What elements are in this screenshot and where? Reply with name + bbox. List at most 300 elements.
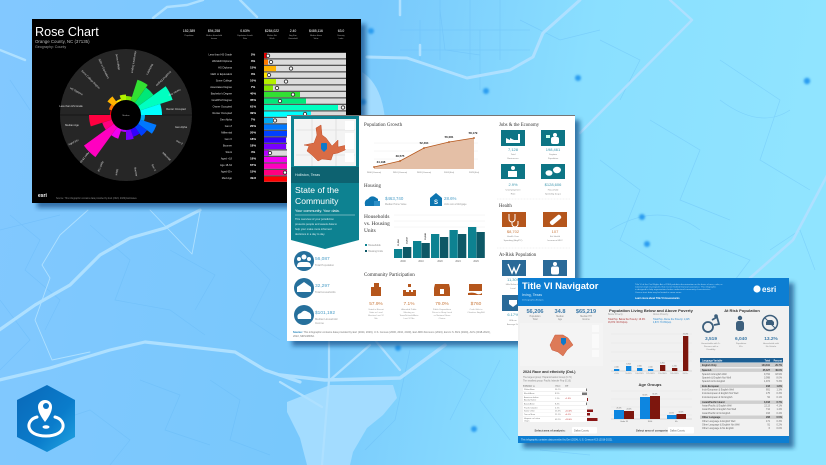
language table: 0.1% [777, 396, 783, 399]
legend: poverty: 4,872: 70.0%/pop. [653, 322, 672, 324]
community participation stats: $760 [471, 301, 482, 307]
bar chart: percentages with benchmark markers: Gen X [225, 137, 232, 141]
language table: 0.3% [777, 420, 783, 423]
stat: total households: Total Households [315, 290, 336, 294]
bar chart: households vs housing units: 2020 [437, 260, 443, 263]
bar chart: percentages with benchmark markers: Aged <18 [221, 156, 233, 160]
key stats row: 152,389 [183, 29, 195, 33]
sidebar: teal title column [291, 116, 359, 249]
language table: 4.1% [777, 404, 783, 408]
title text: Community [295, 196, 339, 206]
key stats row: 2.40 [290, 29, 296, 33]
language table: Other Language & No English [702, 427, 734, 430]
key stats row: $485,116 [309, 29, 323, 33]
key stats row: Population Growth [237, 34, 253, 37]
area chart: population growth: 2000 (Census) [367, 172, 381, 174]
bar chart: percentages with benchmark markers: 20% [250, 130, 256, 134]
at risk icons and stats: Disability [707, 348, 716, 351]
legend: poverty: 16,872: 30.0%/pop. [608, 322, 628, 324]
bar chart: percentages with benchmark markers: 67% [250, 163, 256, 167]
rose chart wheel: Gen Alpha [175, 125, 188, 129]
community participation stats: Meeting on [404, 311, 415, 314]
at risk icons and stats: No Vehicle [766, 346, 777, 348]
community participation stats: Chains [439, 318, 446, 320]
at-risk stat tiles: 6.17% [507, 312, 519, 317]
key stats row [183, 29, 345, 40]
bar chart: percentages with benchmark markers: 10% [250, 78, 256, 82]
race and ethnicity table: +18.0% [565, 419, 572, 421]
panel: Title VI Navigator [518, 278, 794, 448]
bar chart: percentages with benchmark markers: 15% [250, 66, 256, 70]
race and ethnicity table: 25.3% [555, 410, 561, 412]
heading: Population Living Below and Above Poverty: Population Living Below and Above Poverty [609, 308, 694, 313]
bar chart: households vs housing units: 2024 [455, 260, 461, 263]
rose chart wheel: Grad/Prof Degree [155, 70, 172, 88]
language table: 1.3% [777, 388, 783, 392]
community participation stats: vs National Store [434, 314, 451, 317]
at risk icons and stats: Population [736, 342, 747, 345]
race and ethnicity table: 1.1% [555, 398, 560, 400]
community participation stats: Voted in Recent [368, 308, 384, 311]
race and ethnicity table: 2024 Race and ethnicity (DoL) [523, 370, 576, 374]
race and ethnicity table: 36.2% [555, 389, 561, 391]
header band: is designed to help organizations better understand community characteristics. [635, 288, 711, 291]
language table: Asian/Pacific & English Well [702, 404, 732, 408]
source note: 2022, MDS/MDS2. [293, 334, 315, 338]
key stats: population, age, income: 56,206 [526, 309, 544, 315]
bar chart: poverty: 4,800 [660, 362, 665, 364]
community participation stats: Town/School Affairs [399, 314, 419, 317]
language table: 6 [769, 427, 771, 430]
language table: 1,974 [764, 380, 771, 383]
area chart: population growth: 56,081 [445, 135, 454, 139]
key stats row: Income [211, 38, 217, 40]
heading: Health: Health [499, 204, 512, 209]
rose chart wheel: Boomer [133, 167, 139, 177]
bar chart: percentages with benchmark markers: Med Age [222, 176, 233, 180]
bar chart: percentages with benchmark markers: 61% [250, 104, 256, 108]
bar chart: percentages with benchmark markers: 15% [250, 170, 256, 174]
heading: Housing: Housing [364, 184, 381, 189]
heading: Population Growth: Population Growth [364, 123, 403, 128]
language table: 49.0% [775, 369, 783, 372]
bar chart: households vs housing units: 2000 [400, 260, 406, 263]
header band: Learn more about Title VI Assessments [635, 297, 680, 300]
race and ethnicity table: +6.1% [565, 414, 571, 416]
health stat tiles: $8,702 [507, 229, 520, 234]
jobs and economy stat tiles: 198,461 [546, 147, 561, 152]
rose chart wheel: Less than HS Grade [59, 104, 83, 108]
panel: Rose Chart [32, 19, 366, 208]
heading: Rose Chart: Geography: County [35, 45, 66, 49]
bar chart: poverty: 2,110 [648, 366, 653, 368]
race and ethnicity table: 8.9% [555, 393, 560, 395]
bar chart: percentages with benchmark markers: Millennial [221, 130, 232, 134]
bar chart: poverty: 2,660 [637, 366, 642, 368]
key stats row: Median Home [310, 35, 322, 37]
stat: median home value: Median Home Value [385, 203, 407, 206]
at risk icons and stats: Households with 1+ [701, 342, 721, 345]
language table: 175 [766, 392, 771, 395]
language table: 691 [766, 388, 771, 392]
bar chart: percentages with benchmark markers: 7% [251, 85, 255, 89]
at-risk stat tiles [502, 260, 567, 326]
locator map [294, 119, 356, 166]
rose chart wheel: Silent [115, 169, 119, 176]
bar chart: age groups [611, 391, 692, 423]
language table: Spanish & English Well [702, 373, 727, 376]
stat: households with mortgage: S [434, 200, 438, 206]
stat: households with mortgage [430, 193, 467, 206]
race and ethnicity table: The smallest group: Pacific Islander Pop (0.16) [523, 380, 571, 382]
stat: median home value [365, 196, 407, 206]
at risk icons and stats [701, 314, 780, 351]
header band: Irving, Texas [522, 293, 542, 297]
rose chart wheel: Renter Occupied [166, 107, 186, 111]
stat: total population: 56,087 [315, 256, 330, 262]
stat: median household income: Income [315, 321, 324, 325]
stat: total population: Total Population [315, 263, 335, 267]
community participation stats: 57.9% [369, 301, 384, 307]
title text: This overview of your jurisdiction [295, 217, 334, 221]
bar chart: percentages with benchmark markers: 3% [251, 59, 255, 63]
rose chart wheel: Some College Degree [80, 69, 102, 90]
language table: 91 [767, 424, 771, 426]
bar chart: poverty: 3,963 [626, 364, 631, 366]
stat: total population [294, 251, 335, 271]
health stat tiles: 107 [552, 229, 559, 234]
race and ethnicity table: 43.2% [555, 419, 561, 421]
language table: 193 [766, 412, 771, 415]
at-risk stat tiles: Level [510, 288, 516, 290]
language table: Spanish [702, 369, 712, 372]
community participation stats: Election Last 12 [368, 314, 385, 317]
rose chart wheel: Gen Z [175, 139, 184, 146]
community participation stats: Attended Public [401, 308, 418, 311]
rose chart wheel: Bachelor's [145, 63, 154, 76]
heading: At-Risk Population: At-Risk Population [499, 253, 537, 258]
at-risk stat tiles: 11,309 [507, 277, 520, 282]
bar chart: percentages with benchmark markers: 20% [250, 124, 256, 128]
language table: 18.9% [775, 373, 783, 376]
language table: 0.3% [777, 392, 783, 395]
at-risk stat tiles: HHs Below the [506, 283, 521, 286]
race and ethnicity table: Diff [565, 386, 569, 388]
selector: area of comparison: Select area of comparison for: [636, 428, 676, 432]
bar chart: poverty: 200%+ [683, 373, 688, 375]
area chart: population growth [367, 131, 479, 174]
esri logo and source line: esri [38, 193, 48, 199]
language table: Asian/Pacific Island [702, 401, 725, 404]
language table: 144,811 [761, 364, 771, 367]
language table: 0.4% [777, 412, 783, 415]
health stat tiles: Health Care [507, 235, 520, 238]
esri logo and source line [38, 193, 138, 200]
footer band [518, 436, 789, 443]
stat: households with mortgage: Units w/o a Mortgage [444, 203, 467, 206]
bar chart: households vs housing units [365, 215, 485, 263]
language table: Other Language [702, 416, 721, 419]
key stats: population, age, income: Income [582, 319, 590, 321]
panel: State of the Community [287, 115, 580, 346]
language table: 0.5% [777, 416, 783, 419]
community participation stats: Prices to Shop Local [432, 311, 453, 314]
heading: Households vs Housing Units: vs. Housing [364, 221, 390, 227]
bar chart: percentages with benchmark markers: Bachelor's Degree [211, 92, 233, 96]
rose chart wheel [56, 49, 196, 181]
language table: 52 [767, 396, 771, 399]
rose chart wheel: Millennial [161, 151, 172, 162]
language table: 0.0% [777, 427, 783, 430]
jobs and economy stat tiles: Daytime [549, 153, 558, 156]
at risk icons and stats: 3,519 [705, 336, 717, 342]
area chart: population growth: 58,179 [469, 131, 478, 135]
key stats row: Value [314, 38, 318, 40]
language table: Indo-European & English Not Well [702, 392, 739, 395]
stat: total households: 32,297 [315, 283, 330, 289]
source note: Source: This infographic contains data provided by Esri (2024, 2029), U.S. Census (2000, 2010, 2020), Esri-MRI-Simmons (2024), Esri-U.S. BLS (2024), ACS (2018-2022), [293, 330, 491, 334]
bar chart: percentages with benchmark markers: Some College [216, 78, 233, 82]
race and ethnicity table: 8.4% [555, 404, 560, 406]
bar chart: poverty: 2,110 [614, 366, 619, 368]
race and ethnicity table: American Indian [524, 396, 538, 399]
at risk icons and stats: 6,040 [735, 336, 747, 342]
bar chart: households vs housing units: Households [368, 244, 381, 247]
bar chart: percentages with benchmark markers: Aged 65+ [221, 170, 232, 174]
language table: 268 [766, 416, 771, 419]
header band [518, 278, 789, 306]
locator map [520, 323, 603, 366]
heading: Jobs and the Economy: Jobs & the Economy [499, 123, 540, 128]
stat: median household income: $101,192 [315, 310, 335, 316]
bar chart: households vs housing units: 2029 [473, 260, 479, 263]
title text: Your community. Your data. [295, 209, 340, 213]
bar chart: percentages with benchmark markers: HS/GED Diploma [212, 59, 233, 63]
race and ethnicity table: +10.0% [565, 410, 572, 412]
language table: 0.2% [777, 424, 783, 426]
bar chart: percentages with benchmark markers: 18% [250, 156, 256, 160]
selector: area of comparison [636, 427, 694, 434]
jobs and economy stat tiles: Unemployment [506, 188, 521, 192]
bar chart: percentages with benchmark markers: Silent [226, 150, 232, 154]
bar chart: percentages with benchmark markers: Grad/Prof Degree [212, 98, 233, 102]
key stats: population, age, income: Total [533, 318, 538, 321]
race and ethnicity table: 21.1% [555, 414, 561, 416]
area chart: population growth: 2024 (Est) [444, 171, 454, 174]
bar chart: percentages with benchmark markers: 18% [250, 137, 256, 141]
bar chart: poverty [611, 334, 692, 375]
stat: total households [294, 278, 336, 298]
bar chart: percentages with benchmark markers: Gen Alpha [220, 118, 233, 122]
community participation stats: Last 12 Mo [404, 317, 415, 320]
race and ethnicity table: Hispanic or Latino [524, 417, 541, 420]
legend: poverty [608, 313, 690, 324]
race and ethnicity table: Pacific Islander [524, 408, 538, 410]
jobs and economy stat tiles [501, 130, 565, 196]
key stats row: Index [339, 38, 343, 40]
title text: decisions in a day to day. [295, 232, 325, 236]
jobs and economy stat tiles: Population [548, 157, 559, 160]
bar chart: poverty: <50% [614, 372, 619, 375]
at risk icons and stats: 13.2% [764, 336, 779, 342]
bar chart: age groups: 11.5% [669, 412, 674, 414]
language table: Other Language & English Not Well [702, 424, 740, 426]
area chart: population growth: 2020 (Census) [417, 172, 431, 174]
heading: Community Participation: Community Participation [364, 273, 415, 278]
key stats: population, age, income: Median HH [580, 316, 592, 318]
source note [293, 330, 491, 338]
bar chart: percentages with benchmark markers: 7% [251, 118, 255, 122]
language table: 2,113 [764, 404, 771, 408]
bar chart: percentages with benchmark markers: Age 18-64 [220, 163, 233, 167]
community participation stats: Public Expenditure [433, 308, 452, 311]
bar chart: poverty: 185-199% [670, 373, 679, 375]
jobs and economy stat tiles: 7,128 [508, 147, 519, 152]
bar chart: age groups: 63.0% [642, 394, 648, 396]
heading: Age Groups: Age Groups [639, 382, 662, 387]
community participation stats: Mo [374, 318, 378, 320]
language table: 25,327 [763, 369, 771, 372]
rose chart wheel: Aged 18-64 [79, 151, 91, 164]
language table: Asian/Pacific & No English [702, 412, 731, 415]
race and ethnicity table: 0.1% [555, 408, 560, 410]
bar chart: age groups: 65.0% [652, 394, 658, 396]
race and ethnicity table: Value [555, 386, 561, 388]
race and ethnicity table: Black Alone [524, 392, 535, 395]
bar chart: percentages with benchmark markers [208, 52, 346, 182]
rose chart wheel: Aged 65+ [68, 138, 80, 146]
bar chart: percentages with benchmark markers: HS Diploma [218, 66, 233, 70]
key stats row: $284,022 [265, 29, 279, 33]
language table: Spanish & English Not Well [702, 376, 732, 380]
heading: Households vs Housing Units: Households [364, 214, 389, 220]
rose chart wheel: Aged <18 [96, 161, 105, 173]
rose chart wheel: Median [122, 115, 130, 117]
stat: median home value: $463,740 [385, 196, 404, 201]
rose chart wheel: Owner Occ. [167, 88, 181, 98]
key stats row: Household [288, 38, 298, 40]
legend: poverty: Below Poverty: [608, 313, 624, 316]
heading: Households vs Housing Units: Units [364, 228, 376, 234]
race and ethnicity table: Asian Alone [524, 402, 535, 406]
bar chart: percentages with benchmark markers: Renter Occupied [213, 111, 233, 115]
heading: Rose Chart [35, 25, 99, 49]
bar chart: percentages with benchmark markers: 3% [251, 72, 255, 76]
jobs and economy stat tiles: $128,606 [545, 182, 562, 187]
language table: Spanish & No English [702, 380, 726, 383]
bar chart: households vs housing units: 11,284 [397, 239, 400, 246]
header band: Demographic Analysis [522, 298, 545, 302]
race and ethnicity table [523, 370, 598, 422]
legend: poverty: Total Pop. Above the Poverty: 1,225 [653, 318, 690, 321]
bar chart: age groups: 25.5% [616, 408, 622, 410]
rose chart wheel: GED or Equivalent [98, 58, 110, 79]
language table: Asian/Pacific & English Not Well [702, 408, 737, 411]
community participation stats: 7.1% [404, 301, 415, 307]
selector: area of analysis: Select area of analysis: [535, 428, 566, 432]
key stats: population, age, income: 34.8 [555, 309, 565, 315]
bar chart: age groups: 24.0% [626, 408, 632, 410]
bar chart: percentages with benchmark markers: 35% [250, 98, 256, 102]
esri logo and source line: Source: This infographic contains data provided by Esri (2024, 2029) Estimates. [56, 197, 138, 200]
rose chart wheel: Some College [115, 53, 121, 71]
key stats: population, age, income [526, 309, 596, 321]
jobs and economy stat tiles: Household [548, 190, 559, 192]
bar chart: percentages with benchmark markers: Less than HS Grade [208, 52, 233, 56]
key stats row: Diversity [337, 34, 345, 37]
rose chart wheel: Median Age [65, 123, 79, 127]
language table [700, 358, 783, 430]
heading: Households vs Housing Units [364, 214, 390, 234]
header band: Title VI Navigator [522, 280, 599, 291]
heading: At Risk Population: At Risk Population [724, 308, 760, 313]
language table: Indo-European & No English [702, 396, 733, 399]
jobs and economy stat tiles: Total [511, 153, 516, 156]
language table: 9,762 [764, 373, 771, 376]
title text: presents people and assets data to [295, 222, 337, 226]
language table: Indo-European [702, 385, 719, 388]
jobs and economy stat tiles: Rate [511, 192, 516, 196]
bar chart: poverty: 2,410 [672, 366, 677, 368]
jobs and economy stat tiles: Spending (Cap.) [545, 194, 561, 196]
language table: 918 [766, 385, 771, 388]
legend: poverty: Above Poverty: [653, 313, 669, 316]
community participation stats: Charities: Avg/HH [467, 311, 485, 314]
bar chart: poverty: 50-99% [625, 373, 632, 375]
bar chart: households vs housing units: 19,548 [424, 233, 427, 240]
area chart: population growth: 52,464 [420, 141, 429, 145]
key stats row: Avg Size [289, 34, 297, 37]
heading: Rose Chart: Orange County, NC (37135) [35, 39, 90, 44]
area chart: population growth: 34,198 [377, 160, 386, 164]
key stats row: Rate [243, 37, 247, 40]
community participation stats: 79.0% [435, 301, 450, 307]
language table: 5.3% [777, 380, 783, 383]
sidebar: teal title column: Holliston, Texas [295, 173, 320, 177]
health stat tiles: Insurance MDV [547, 239, 563, 242]
health stat tiles: Spending (Avg/PC) [504, 239, 523, 242]
bar chart: percentages with benchmark markers: 39% [250, 111, 256, 115]
language table: Other Language & English Well [702, 420, 736, 423]
race and ethnicity table: +1.3% [565, 398, 571, 400]
language table: 6.7% [777, 401, 783, 404]
selector: area of comparison: Dallas County [670, 430, 686, 432]
community participation stats: Cash Gifts to [470, 308, 483, 311]
legend: poverty: Total Pop. Below the Poverty: 16.0% [608, 318, 645, 321]
race and ethnicity table: Some Other [524, 410, 535, 412]
bar chart: percentages with benchmark markers: Owner Occupied [213, 104, 233, 108]
selector: area of analysis: Dallas County [574, 430, 590, 432]
key stats row: $94,258 [208, 29, 220, 33]
at risk icons and stats: 65+ [739, 346, 744, 348]
language table: 712 [766, 408, 771, 411]
bar chart: age groups: Under 18 [620, 421, 628, 423]
header band: Title VI of the Civil Rights Act of 1964 prohibits discrimination on the basis of race, color, or [635, 283, 723, 286]
bar chart: poverty: 33,284 [683, 334, 688, 336]
language table: 29.7% [775, 364, 783, 367]
bar chart: poverty: 100-124% [635, 373, 644, 375]
rose chart wheel: HS Diploma [69, 86, 84, 96]
community participation stats: State or Local [369, 311, 383, 314]
key stats: population, age, income: Age [558, 318, 563, 321]
bar chart: poverty: 125-149% [646, 373, 655, 375]
bar chart: percentages with benchmark markers: Gen Z [225, 124, 232, 128]
stat: households with mortgage: 28.6% [444, 196, 457, 201]
language table: 1.4% [777, 408, 783, 411]
language table: English Only [702, 364, 717, 367]
at risk icons and stats: Households with [763, 342, 780, 345]
header band: esri [762, 285, 776, 294]
